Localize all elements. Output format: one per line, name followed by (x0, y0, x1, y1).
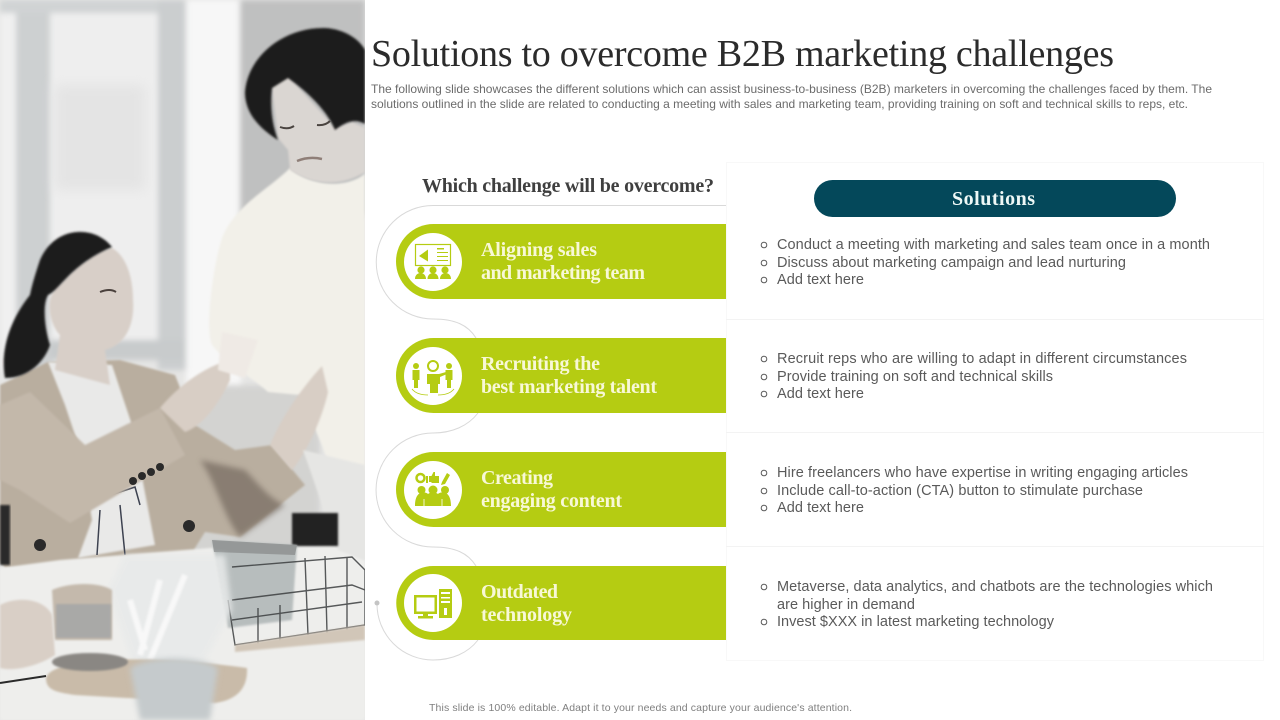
woman: neck and face (50, 248, 133, 385)
icon: desktop computer (414, 589, 452, 618)
challenge 2: recruiting (396, 338, 726, 413)
woman: jacket (0, 360, 305, 568)
solutions list 3: Include call-to-action (CTA) button to stimulate purchase (777, 483, 1143, 499)
desk items (212, 540, 297, 628)
label: engaging content (481, 490, 622, 512)
label (481, 581, 572, 626)
solutions list 2: Recruit reps who are willing to adapt in different circumstances (777, 351, 1187, 367)
footer note: This slide is 100% editable. Adapt it to your needs and capture your audience's attention. (429, 702, 852, 714)
label (481, 353, 657, 398)
woman: shirt (48, 362, 155, 558)
solutions list 2: Provide training on soft and technical skills (777, 369, 1053, 385)
solutions list 4 (761, 579, 1213, 630)
description (371, 82, 1212, 111)
solutions list 4: are higher in demand (777, 597, 915, 613)
challenge 3: creating content (396, 452, 726, 527)
icon: team with content ideas (415, 472, 451, 506)
solutions list 4: Invest $XXX in latest marketing technology (777, 614, 1055, 630)
solutions header pill: Solutions (952, 188, 1035, 210)
label: Creating (481, 467, 553, 489)
label: and marketing team (481, 262, 645, 284)
solutions list 2 (761, 351, 1187, 402)
man: neck and face (272, 76, 365, 182)
hands (160, 354, 328, 470)
solutions list 1: Conduct a meeting with marketing and sales team once in a month (777, 237, 1210, 253)
solutions list 1: Add text here (777, 272, 864, 288)
label: best marketing talent (481, 376, 657, 398)
solutions list 3: Add text here (777, 500, 864, 516)
desk (3, 546, 327, 570)
title: Solutions to overcome B2B marketing challenges (371, 33, 1114, 75)
label (481, 239, 645, 284)
label: Recruiting the (481, 353, 600, 375)
photo: two colleagues at a desk (0, 0, 365, 720)
solutions list 1: Discuss about marketing campaign and lead nurturing (777, 255, 1126, 271)
connector line (374, 206, 726, 660)
label: Aligning sales (481, 239, 597, 261)
man: sweater (209, 168, 365, 470)
solutions list 3: Hire freelancers who have expertise in writing engaging articles (777, 465, 1188, 481)
solutions list 3 (761, 465, 1188, 516)
label: technology (481, 604, 572, 626)
description: solutions outlined in the slide are related to conducting a meeting with sales and marketing team, providing training on soft and technical skills to reps, etc. (371, 97, 1188, 111)
icon: recruiter and candidates (412, 361, 454, 395)
solutions list 2: Add text here (777, 386, 864, 402)
heading: which challenge: Which challenge will be overcome? (422, 175, 714, 197)
label: Outdated (481, 581, 558, 603)
woman: hair (4, 232, 112, 378)
solutions list 4: Metaverse, data analytics, and chatbots are the technologies which (777, 579, 1213, 595)
description: The following slide showcases the different solutions which can assist business-to-business (B2B) marketers in overcoming the challenges faced by them. The (371, 82, 1212, 96)
icon: presentation to audience (415, 244, 451, 279)
solutions header pill (814, 180, 1176, 217)
woman: sleeve (0, 392, 185, 523)
man: hair (245, 28, 365, 140)
solutions list 1 (761, 237, 1210, 288)
challenge 4: outdated technology (396, 566, 726, 640)
challenge 1: aligning sales (396, 224, 726, 299)
panel: solutions table (726, 162, 1264, 660)
label (481, 467, 622, 512)
